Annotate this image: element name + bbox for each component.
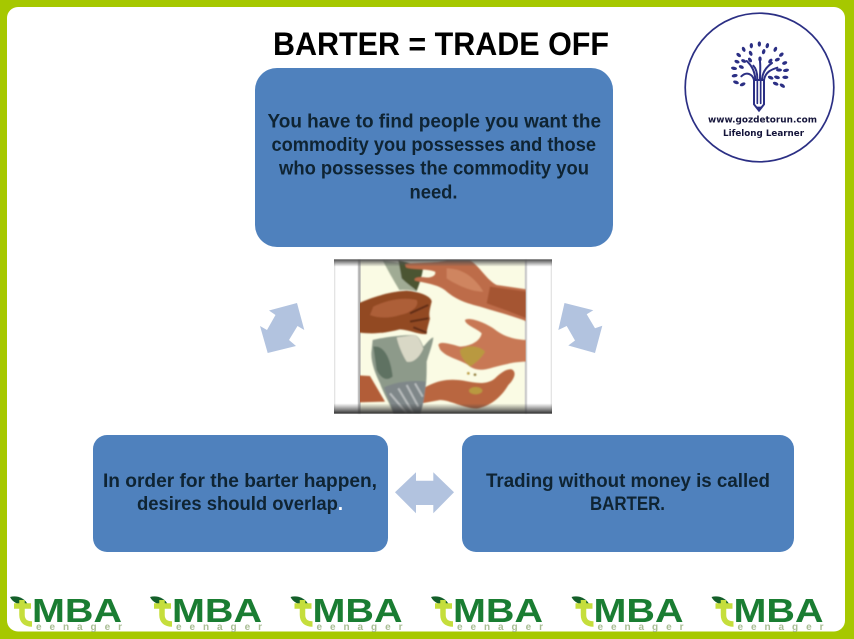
panel: find people: You have to find people you want the	[268, 112, 601, 132]
title: BARTER = TRADE OFF	[273, 26, 609, 62]
icon: pencil tree	[731, 41, 789, 112]
logo strip: tMBA Teenager 1: eenager	[36, 622, 122, 633]
logo: gozdetorun circle badge	[685, 13, 834, 162]
panel: trading without money: BARTER.	[590, 494, 665, 515]
panel: desires overlap	[93, 435, 388, 552]
logo strip: tMBA Teenager 6	[712, 592, 824, 633]
logo strip: tMBA Teenager 1: MBA	[32, 592, 122, 629]
logo strip: tMBA Teenager 4	[431, 592, 543, 633]
logo strip: tMBA Teenager 2: eenager	[176, 622, 262, 633]
logo strip: tMBA Teenager 1	[10, 592, 122, 633]
logo strip: tMBA Teenager 4: eenager	[457, 622, 543, 633]
logo strip: tMBA Teenager 5: MBA	[594, 592, 684, 629]
panel: find people: need.	[410, 182, 458, 204]
logo strip: tMBA Teenager 5	[572, 592, 684, 633]
arrow: top box to right box	[558, 303, 602, 353]
image: hands trading fish and grain	[334, 259, 552, 414]
logo strip: tMBA Teenager 3: eenager	[316, 622, 403, 633]
panel: find people: who possesses the commodity you	[278, 158, 589, 180]
panel: desires overlap: desires should overlap.	[137, 494, 343, 515]
panel: find people	[255, 68, 613, 247]
logo website text: www.gozdetorun.com	[708, 116, 817, 126]
logo strip: tMBA Teenager 3: MBA	[312, 592, 402, 629]
arrow: top box to left box	[260, 303, 304, 353]
logo strip: tMBA Teenager 4: MBA	[453, 592, 543, 629]
panel: trading without money	[462, 435, 794, 552]
logo strip: tMBA Teenager 6: eenager	[738, 622, 824, 633]
arrow: horizontal double arrow	[395, 472, 454, 513]
logo strip: tMBA Teenager 2: MBA	[172, 592, 262, 629]
logo strip: tMBA Teenager 6: MBA	[734, 592, 824, 629]
logo strip: tMBA Teenager 2	[150, 592, 262, 633]
logo tagline: Lifelong Learner	[723, 129, 805, 139]
panel: desires overlap: In order for the barter happen,	[103, 471, 377, 492]
panel: find people: commodity you possesses and those	[272, 135, 596, 156]
panel: trading without money: Trading without money is called	[486, 471, 770, 492]
logo strip: tMBA Teenager 5: eenager	[598, 622, 684, 633]
logo strip: tMBA Teenager 3	[290, 592, 403, 633]
